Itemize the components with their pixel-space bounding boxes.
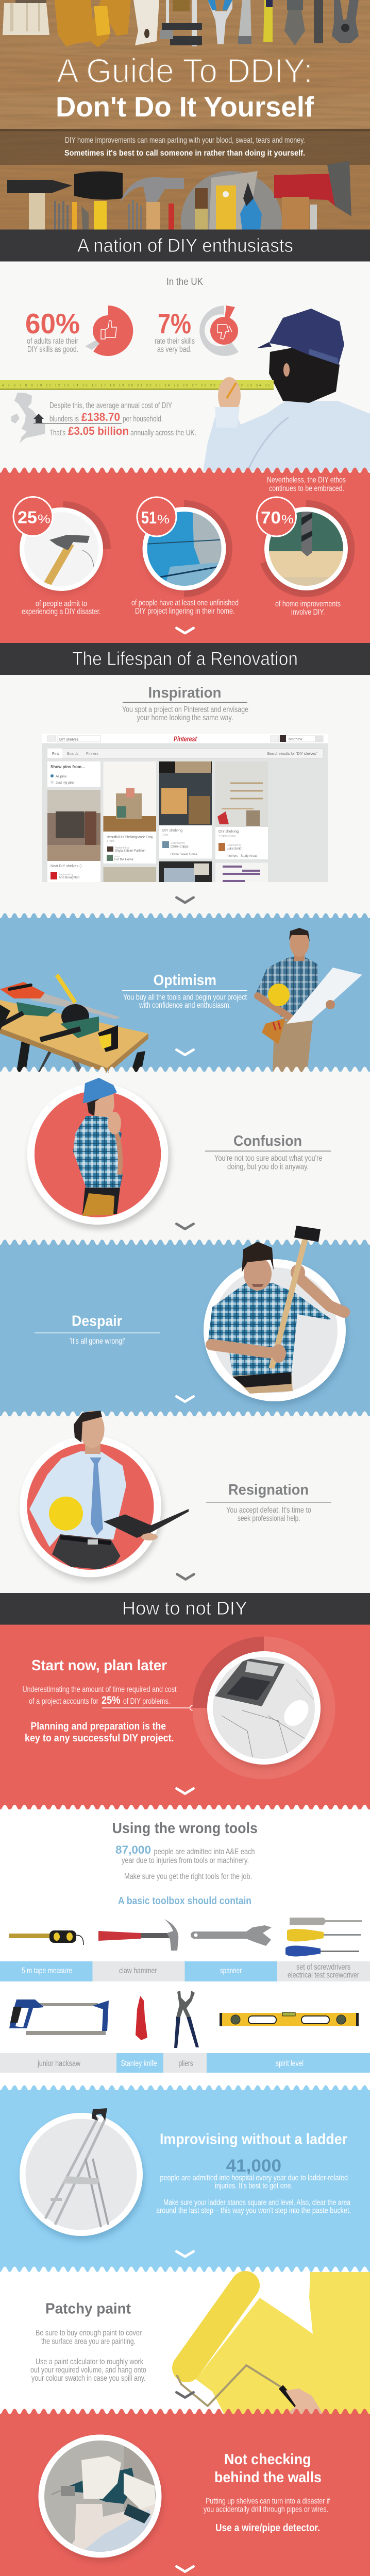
icon: pliers <box>174 1991 199 2048</box>
table: toolbox labels row 2: junior hacksaw <box>37 2059 80 2068</box>
photo: man measuring wall <box>203 309 370 471</box>
divider wave <box>0 2409 370 2414</box>
photo: confused man in circle <box>27 1078 170 1229</box>
text block: cost of blunders: blunders is <box>49 415 79 423</box>
screenshot: Pinterest search results: Ann Broughton <box>59 876 79 879</box>
stat: 70 percent drill: % <box>281 513 294 527</box>
text block: cost of blunders <box>49 401 196 437</box>
stat: 25 percent hammer: 25 <box>18 508 37 527</box>
text block <box>122 705 248 722</box>
chart: donut with calculator photo <box>193 1636 335 1780</box>
text block <box>23 1685 177 1706</box>
text block: Underestimating the amount of time required and cost <box>23 1685 177 1694</box>
stat: 7 percent: as very bad. <box>157 345 192 354</box>
screenshot: Pinterest search results: DIY shelving <box>162 829 182 833</box>
text block: intro <box>64 136 305 158</box>
icon: UK map with house <box>11 393 122 443</box>
heading: Not checking <box>224 2451 311 2468</box>
table: toolbox labels row 1: claw hammer <box>119 1967 157 1975</box>
icon: spanner <box>191 1925 272 1946</box>
panel: Improvising without a ladder <box>20 2108 351 2257</box>
arrow <box>176 2567 194 2572</box>
text: 'It's all gone wrong!' <box>70 1337 125 1346</box>
stat: 51 percent blue wood: 51 <box>141 508 157 527</box>
text block: Use a paint calculator to roughly work <box>36 2358 144 2366</box>
text block: You spot a project on Pinterest and envisage <box>122 705 248 714</box>
screenshot: Pinterest search results: Pins <box>52 752 59 756</box>
heading: Resignation <box>228 1482 309 1498</box>
text: key message: key to any successful DIY project. <box>25 1733 174 1744</box>
icon: junior hacksaw <box>9 1999 109 2035</box>
chart: 7 percent donut with thumbs down <box>199 306 239 356</box>
text: nevertheless <box>267 476 346 493</box>
icon: screwdrivers <box>285 1918 362 1956</box>
table: toolbox labels row 1: 5 m tape measure <box>22 1967 72 1975</box>
screenshot: Pinterest search results: Repinned by <box>171 842 186 845</box>
divider wave <box>0 913 370 919</box>
screenshot: Pinterest search results: DIY shelving <box>218 830 239 834</box>
icon: claw hammer <box>98 1919 178 1951</box>
text block <box>30 2329 146 2383</box>
screenshot: Pinterest search results: Home Sweet Home <box>171 853 198 856</box>
heading: Using the wrong tools <box>112 1820 258 1837</box>
screenshot: Pinterest search results: All pins <box>56 775 67 778</box>
text block: You're not too sure about what you're <box>214 1154 323 1163</box>
text block: with confidence and enthusiasm. <box>139 1001 231 1010</box>
icon: spirit level <box>220 2012 359 2026</box>
screenshot: Pinterest search results: 1 repin <box>107 840 115 843</box>
title <box>57 58 314 116</box>
screenshot: Pinterest search results <box>42 734 328 882</box>
text block: people are admitted into A&E each <box>154 1848 255 1856</box>
text block: You buy all the tools and begin your project <box>123 993 247 1002</box>
photo: paint roller <box>177 2272 370 2414</box>
text block: cost of blunders: per household. <box>123 415 163 423</box>
text block: doing, but you do it anyway. <box>227 1162 309 1172</box>
heading: Start now, plan later <box>31 1657 167 1674</box>
text block <box>123 993 247 1010</box>
panel: Despair <box>35 1226 347 1405</box>
table: toolbox labels row 1: spanner <box>220 1967 242 1975</box>
text block: of a project accounts for <box>29 1697 99 1706</box>
stat: 25 percent hammer <box>13 497 111 616</box>
heading: Confusion <box>233 1133 302 1149</box>
divider wave <box>0 1805 370 1810</box>
heading band: A nation of DIY enthusiasts <box>0 230 370 262</box>
text block: You accept defeat. It's time to <box>226 1506 311 1515</box>
stat: 7 percent: rate their skills <box>155 337 195 346</box>
arrow <box>176 628 194 633</box>
heading: Despair <box>72 1313 122 1330</box>
icon: measuring tape <box>0 377 274 428</box>
text block <box>156 2174 351 2215</box>
stat: 60 percent: 60% <box>25 308 80 340</box>
screenshot: Pinterest search results: Claire Cripps <box>171 845 189 849</box>
arrow <box>176 1396 194 1401</box>
text block <box>226 1506 311 1523</box>
photo: angry man with sledgehammer <box>204 1226 347 1405</box>
screenshot: Pinterest search results: Repinned by <box>227 844 242 847</box>
stat: 60 percent <box>25 308 80 354</box>
screenshot: Pinterest search results: Luke Smith <box>227 848 242 851</box>
arrow <box>177 1574 194 1580</box>
text block: Make sure you get the right tools for the job. <box>124 1872 252 1881</box>
screenshot: Pinterest search results: Repinned by <box>59 873 74 876</box>
panel: Patchy paint <box>30 2272 370 2414</box>
text block: cost of blunders: That's <box>49 429 65 437</box>
panel: DIY ethos <box>13 476 355 633</box>
heading: behind the walls <box>214 2469 322 2486</box>
divider wave <box>0 2086 370 2091</box>
text block: of DIY problems. <box>123 1697 170 1706</box>
arrow <box>176 1050 194 1055</box>
heading: Improvising without a ladder <box>160 2131 347 2147</box>
stat: 70 percent drill: involve DIY. <box>291 608 325 617</box>
text: nevertheless: Nevertheless, the DIY ethos <box>267 476 346 484</box>
stat: 70 percent drill <box>257 497 355 617</box>
text block: seek professional help. <box>238 1514 300 1523</box>
table: toolbox labels row 2: pliers <box>179 2059 193 2068</box>
heading: Optimism <box>154 972 216 989</box>
text block: Use a wire/pipe detector. <box>215 2522 320 2534</box>
stat: 7 percent <box>155 308 195 354</box>
heading band: The Lifespan of a Renovation: The Lifespan of a Renovation <box>72 648 298 669</box>
stat: 25 percent hammer: of people admit to <box>36 600 87 608</box>
stat: 25 percent hammer: % <box>38 512 51 527</box>
panel: Confusion <box>27 1078 331 1229</box>
text block: intro: Sometimes it's best to call someone in rather than doing it yourself. <box>64 149 305 158</box>
arrow <box>176 897 194 903</box>
stat: 25 percent hammer: experiencing a DIY disaster. <box>22 607 101 616</box>
screenshot: Pinterest search results: Matthew <box>289 738 302 741</box>
arrow <box>176 1789 194 1794</box>
heading band: A nation of DIY enthusiasts: A nation of DIY enthusiasts <box>77 235 293 256</box>
stat: 7 percent: 7% <box>158 308 191 340</box>
subheading: A basic toolbox should contain <box>118 1895 251 1907</box>
panel: Resignation <box>20 1411 331 1581</box>
text block <box>115 1843 255 1881</box>
photo: drilling into wall <box>38 2435 163 2562</box>
screenshot: Pinterest search results: Boards <box>67 752 79 756</box>
text block: your home looking the same way. <box>137 714 233 722</box>
screenshot: Pinterest search results: DIY shelves <box>59 738 79 742</box>
text block: 87,000 <box>115 1843 151 1856</box>
divider wave <box>0 468 370 473</box>
panel: Optimism <box>0 928 362 1073</box>
screenshot: Pinterest search results: Pinterest <box>174 735 197 743</box>
chart: 25 percent pointer line <box>102 1705 195 1710</box>
heading: Inspiration <box>148 685 222 701</box>
text block <box>214 1154 323 1172</box>
text block: Be sure to buy enough paint to cover <box>36 2329 142 2337</box>
heading band: How to not DIY <box>0 1593 370 1625</box>
title: A Guide To DDIY: <box>57 52 313 90</box>
arrow <box>176 2393 194 2398</box>
arrow <box>176 1224 194 1229</box>
photo: smiling man with plans <box>256 928 362 1072</box>
text block: your colour swatch in case you spill any. <box>31 2374 145 2383</box>
screenshot: Pinterest search results: For the Home <box>114 858 133 861</box>
text: nevertheless: continues to be embraced. <box>269 484 344 493</box>
panel: hero photo of tools on wood <box>0 0 370 230</box>
divider wave <box>0 2267 370 2272</box>
text block: cost of blunders: annually across the UK. <box>130 429 196 437</box>
photo: workbench with tools <box>0 975 148 1073</box>
divider wave <box>0 1240 370 1245</box>
table: toolbox labels row 1: set of screwdrivers <box>296 1963 350 1972</box>
screenshot: Pinterest search results: Show pins from... <box>51 765 85 769</box>
panel: Start now, plan later <box>23 1636 335 1794</box>
panel: Using the wrong tools <box>0 1820 370 2073</box>
chart: 60 percent donut with thumbs up <box>85 306 133 356</box>
text: In the UK: In the UK <box>166 277 203 287</box>
title: Don't Do It Yourself <box>56 91 314 123</box>
icon: measuring tape: 4 5 6 7 8 9 10 11 12 13 14 15 16 17 18 19 20 21 22 23 24 25 26 27 28 29 30 31 32 33 34 35 <box>2 384 271 387</box>
screenshot: Pinterest search results: Pinners <box>86 752 98 756</box>
text block: cost of blunders: Despite this, the average annual cost of DIY <box>49 401 172 410</box>
table: toolbox labels row 2: Stanley knife <box>121 2059 157 2068</box>
screenshot: Pinterest search results: 4 repins 2 likes <box>218 835 236 838</box>
heading band: The Lifespan of a Renovation <box>0 643 370 675</box>
screenshot: Pinterest search results: Just my pins <box>56 781 75 785</box>
stat: 51 percent blue wood: % <box>157 513 170 527</box>
icon: top row of tools <box>3 0 359 47</box>
screenshot: Pinterest search results: Interiors - Study Areas <box>227 855 257 858</box>
stat: 60 percent: of adults rate their <box>27 337 79 346</box>
text block <box>204 2497 330 2534</box>
photo: stepladder in circle <box>20 2108 144 2240</box>
screenshot: Pinterest search results: Search results for "DIY shelves" <box>267 751 317 756</box>
stat: 41,000 <box>226 2156 281 2176</box>
text block: Putting up shelves can turn into a disaster if <box>206 2497 330 2506</box>
text block: you accidentally drill through pipes or wires. <box>204 2505 328 2514</box>
table: toolbox labels row 2: spirit level <box>276 2059 304 2068</box>
panel: UK statistics over photo <box>0 277 370 471</box>
stat: 51 percent blue wood <box>131 497 239 616</box>
icon: Stanley knife <box>136 1996 147 2040</box>
stat: 70 percent drill: 70 <box>261 508 281 527</box>
panel: Inspiration <box>42 685 328 903</box>
panel: Not checking behind the walls <box>38 2435 330 2572</box>
heading <box>214 2451 322 2486</box>
text block: year due to injuries from tools or machinery. <box>122 1856 249 1865</box>
text block: cost of blunders: £138.70 <box>81 411 120 423</box>
heading: Patchy paint <box>45 2301 131 2317</box>
text block: injuries. It's best to get one. <box>215 2181 293 2191</box>
arrow <box>176 2251 194 2257</box>
heading band: How to not DIY: How to not DIY <box>122 1598 247 1619</box>
divider wave <box>0 1412 370 1417</box>
icon: tape measure <box>9 1930 83 1945</box>
screenshot: Pinterest search results: Repinned by <box>115 846 130 850</box>
text block: intro: DIY home improvements can mean parting with your blood, sweat, tears and money. <box>65 136 305 145</box>
screenshot: Pinterest search results: Shyla Stiteler Parfelon <box>115 850 145 853</box>
screenshot: Pinterest search results: 1 like <box>162 834 169 837</box>
table: toolbox labels row 2 <box>0 2053 370 2073</box>
stat: 60 percent: DIY skills as good. <box>27 345 78 354</box>
icon: bottom row of tools <box>7 161 351 230</box>
stat: 70 percent drill: of home improvements <box>275 600 341 608</box>
screenshot: Pinterest search results: onto <box>114 855 120 858</box>
text block: cost of blunders: £3.05 billion <box>68 425 129 437</box>
text: key message <box>25 1721 174 1744</box>
screenshot: Pinterest search results: Beautiful DIY Shelving Made Easy <box>107 836 154 839</box>
divider wave <box>0 1066 370 1073</box>
text block: the surface area you are painting. <box>41 2337 136 2346</box>
table: toolbox labels row 1 <box>0 1961 370 1981</box>
stat: 51 percent blue wood: DIY project lingering in their home. <box>135 607 235 616</box>
text block: 25% <box>102 1694 121 1706</box>
text: key message: Planning and preparation is the <box>31 1721 166 1732</box>
screenshot: Pinterest search results: Neat DIY shelves :) <box>51 865 81 868</box>
photo: resigned man with laptop <box>20 1411 189 1581</box>
stat: 51 percent blue wood: of people have at least one unfinished <box>131 599 239 607</box>
text block: out your required volume, and hang onto <box>30 2366 146 2375</box>
